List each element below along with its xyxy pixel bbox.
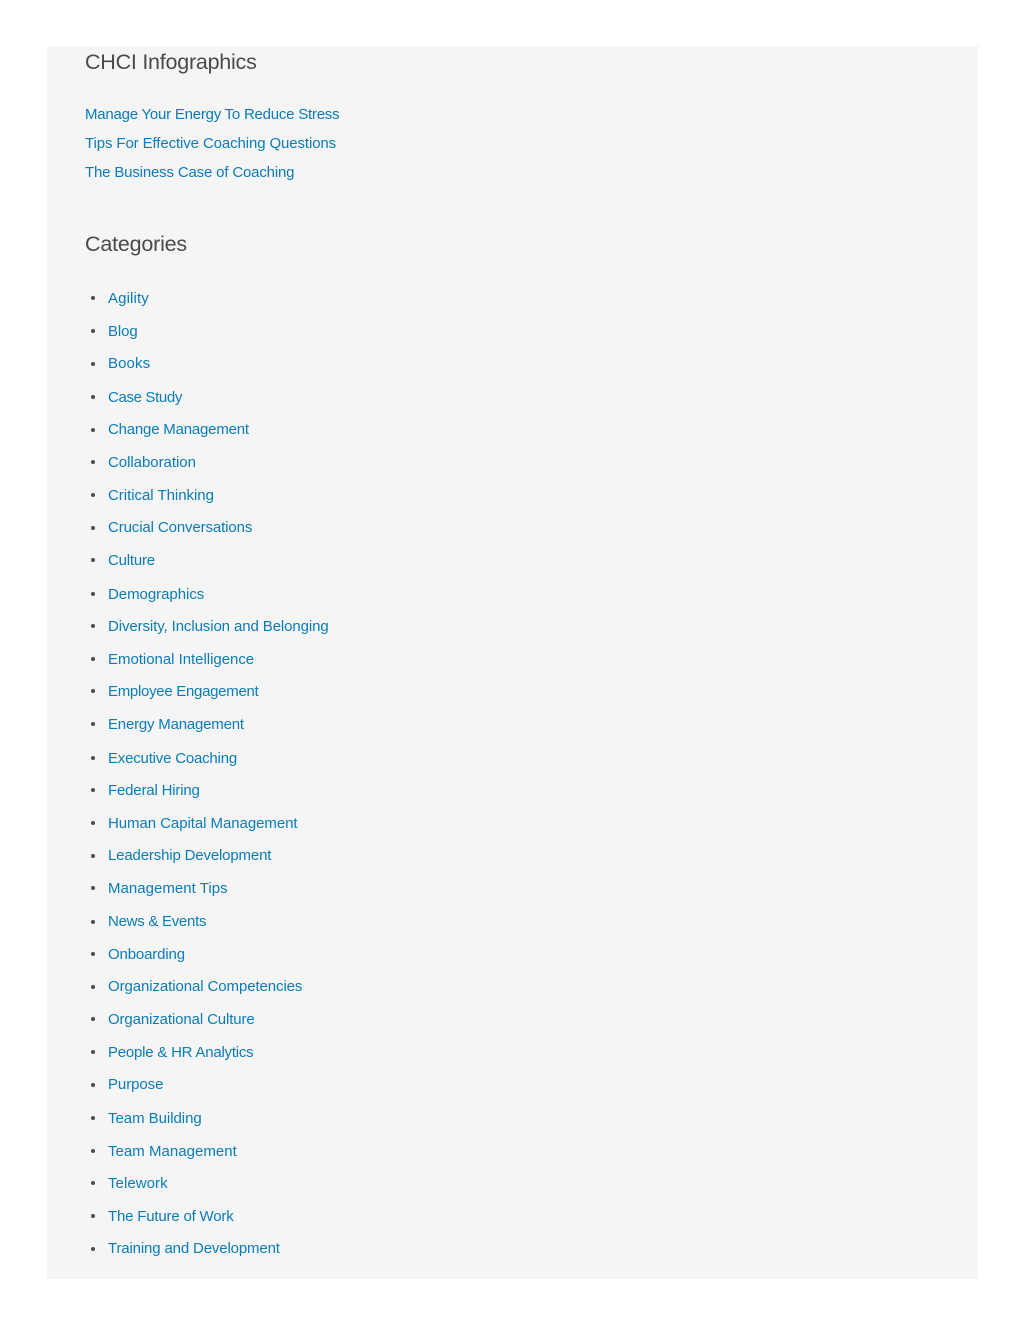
list: categories: Human Capital Management xyxy=(108,815,298,832)
list: categories xyxy=(91,290,329,1257)
list: categories: Emotional Intelligence xyxy=(108,651,254,668)
list: categories: Training and Development xyxy=(108,1240,280,1257)
list: categories: Change Management xyxy=(108,421,249,438)
list: categories: Team Building xyxy=(108,1110,202,1127)
list: categories: Team Management xyxy=(108,1143,237,1160)
list: categories: Culture xyxy=(108,552,155,569)
list: categories: Critical Thinking xyxy=(108,487,214,504)
link list: infographics xyxy=(85,106,340,181)
list: categories: Agility xyxy=(108,290,149,307)
list: categories: Collaboration xyxy=(108,454,196,471)
list: categories: News & Events xyxy=(108,913,206,930)
list: categories: Employee Engagement xyxy=(108,683,258,700)
heading: CHCI Infographics: CHCI Infographics xyxy=(85,50,257,74)
link: business case: The Business Case of Coaching xyxy=(85,164,294,181)
list: categories: Organizational Competencies xyxy=(108,978,302,995)
link: energy: Manage Your Energy To Reduce Stress xyxy=(85,106,339,123)
list: categories: Telework xyxy=(108,1175,168,1192)
list: categories: Demographics xyxy=(108,586,204,603)
list: categories: Management Tips xyxy=(108,880,228,897)
list: categories: Books xyxy=(108,355,150,372)
list: categories: Leadership Development xyxy=(108,847,271,864)
list: categories: Federal Hiring xyxy=(108,782,200,799)
link: coaching questions: Tips For Effective Coaching Questions xyxy=(85,135,336,152)
list: categories: Crucial Conversations xyxy=(108,519,252,536)
heading: Categories: Categories xyxy=(85,232,187,256)
list: categories: Onboarding xyxy=(108,946,185,963)
list: categories: Energy Management xyxy=(108,716,244,733)
list: categories: Organizational Culture xyxy=(108,1011,255,1028)
list: categories: People & HR Analytics xyxy=(108,1044,253,1061)
list: categories: The Future of Work xyxy=(108,1208,234,1225)
list: categories: Diversity, Inclusion and Belonging xyxy=(108,618,329,635)
list: categories: Blog xyxy=(108,323,138,340)
list: categories: Executive Coaching xyxy=(108,750,237,767)
list: categories: Case Study xyxy=(108,389,182,406)
list: categories: Purpose xyxy=(108,1076,163,1093)
